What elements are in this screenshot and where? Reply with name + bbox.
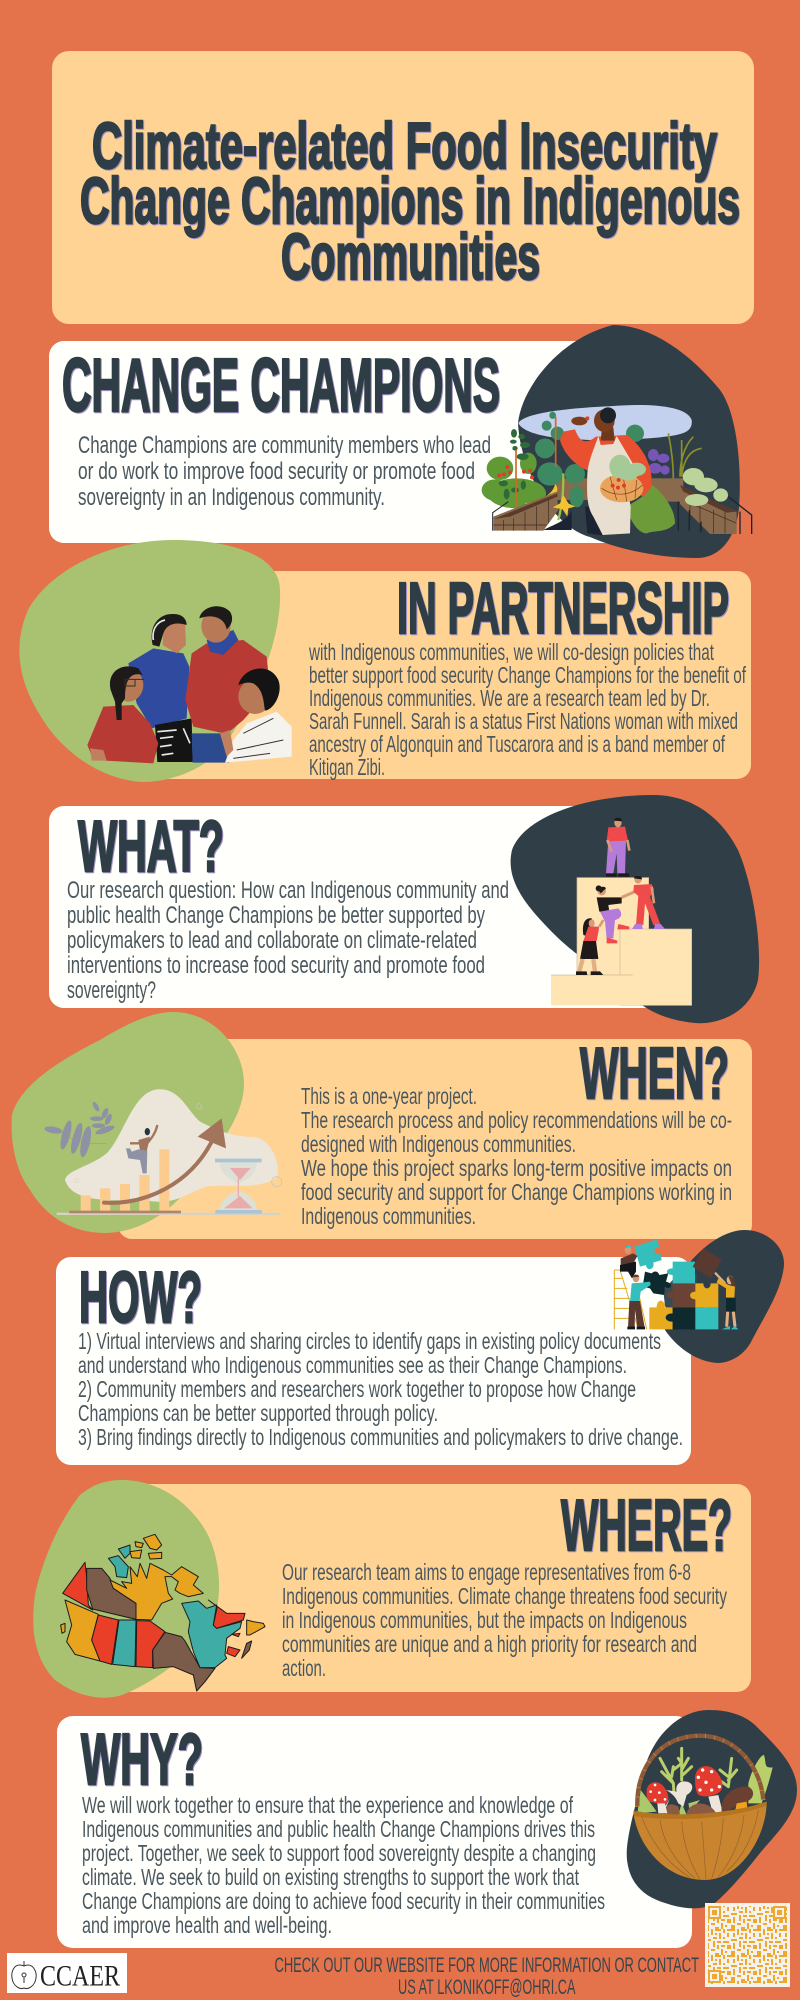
text: what body: interventions to increase food security and promote food (67, 952, 485, 979)
text: when body: Indigenous communities. (301, 1203, 476, 1229)
blob: green background (19, 540, 280, 782)
text: what body: Our research question: How can Indigenous community and (67, 877, 509, 904)
footer call to action: US AT LKONIKOFF@OHRI.CA (398, 1976, 576, 1999)
text: when body: designed with Indigenous communities. (301, 1131, 576, 1157)
text: why body: We will work together to ensure that the experience and knowledge of (82, 1792, 573, 1818)
heading: why: WHY? (81, 1720, 203, 1800)
icon: mushroom basket (633, 1736, 773, 1880)
panel: where (33, 1480, 751, 1698)
blob: dark background (627, 1710, 797, 1908)
text: when body (301, 1083, 732, 1229)
text: why body (82, 1792, 605, 1938)
blob: green background (33, 1480, 219, 1698)
text: change champions body: or do work to improve food security or promote food (78, 458, 475, 485)
text: change champions body: Change Champions are community members who lead (78, 432, 491, 459)
icon: map of Canada (61, 1534, 265, 1691)
logo: CCAER (7, 1953, 127, 1993)
blob: dark background (511, 795, 759, 1023)
text: what body: policymakers to lead and collaborate on climate-related (67, 927, 477, 954)
text: partnership body (308, 639, 746, 780)
blob: green background (12, 1012, 244, 1233)
text: when body: This is a one-year project. (301, 1083, 477, 1109)
text: where body: action. (282, 1655, 326, 1681)
panel: change champions (49, 325, 752, 558)
footer call to action (274, 1954, 699, 1999)
text: what body: sovereignty? (67, 977, 156, 1004)
text: why body: and improve health and well-being. (82, 1912, 332, 1938)
text: where body (282, 1559, 727, 1681)
title heading: Communities (281, 220, 540, 293)
text: what body (67, 877, 509, 1004)
blob: dark background (664, 1230, 784, 1363)
heading: what: WHAT? (78, 807, 224, 887)
heading: how: HOW? (79, 1258, 202, 1338)
text: partnership body: Kitigan Zibi. (309, 754, 385, 780)
icon: gardener with planters (482, 405, 752, 535)
icon: people climbing blocks (551, 818, 692, 1005)
panel: in partnership (19, 540, 751, 782)
panel: how (56, 1230, 784, 1465)
panel: what (49, 795, 759, 1023)
text: how body (78, 1328, 683, 1450)
text: how body: Champions can be better supported through policy. (78, 1400, 438, 1426)
logo: CCAER: CCAER (40, 1960, 120, 1992)
icon: team assembling puzzle (614, 1239, 738, 1329)
title heading (80, 109, 740, 293)
icon: four people together (87, 606, 292, 763)
blob: dark background (518, 325, 740, 558)
text: change champions body (78, 432, 491, 511)
icon: growth chart with hourglass (44, 1089, 282, 1215)
text: why body: climate. We seek to build on existing strengths to support the work that (82, 1864, 579, 1890)
panel: when (12, 1012, 752, 1239)
text: change champions body: sovereignty in an Indigenous community. (78, 484, 385, 511)
text: what body: public health Change Champions be better supported by (67, 902, 485, 929)
panel: title (52, 51, 754, 324)
QR code (705, 1903, 790, 1987)
panel: why (57, 1710, 797, 1948)
